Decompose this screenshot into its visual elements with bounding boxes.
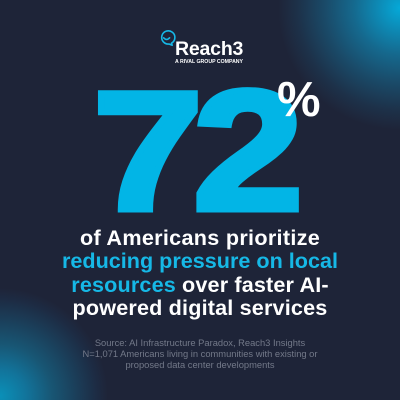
headline line 2: reducing pressure on local bbox=[62, 248, 338, 273]
icon: speech bubble smile bbox=[160, 30, 176, 46]
percent sign: % bbox=[277, 73, 321, 127]
headline line 1: of Americans prioritize bbox=[80, 225, 320, 250]
logo tagline: A RIVAL GROUP COMPANY bbox=[175, 58, 243, 64]
headline bbox=[62, 225, 338, 320]
source note bbox=[82, 338, 318, 370]
source line 3: proposed data center developments bbox=[125, 360, 275, 370]
logo wordmark: Reach3 bbox=[175, 38, 243, 60]
source line 1: Source: AI Infrastructure Paradox, Reach3 Insights bbox=[95, 338, 305, 348]
headline line 4: powered digital services bbox=[73, 295, 327, 320]
headline line 3: resources over faster AI- bbox=[71, 272, 329, 297]
digit 2: 2 bbox=[193, 55, 303, 246]
logo: Reach3 bbox=[160, 30, 243, 64]
source line 2: N=1,071 Americans living in communities with existing or bbox=[82, 349, 318, 359]
digit 7: 7 bbox=[93, 57, 203, 245]
